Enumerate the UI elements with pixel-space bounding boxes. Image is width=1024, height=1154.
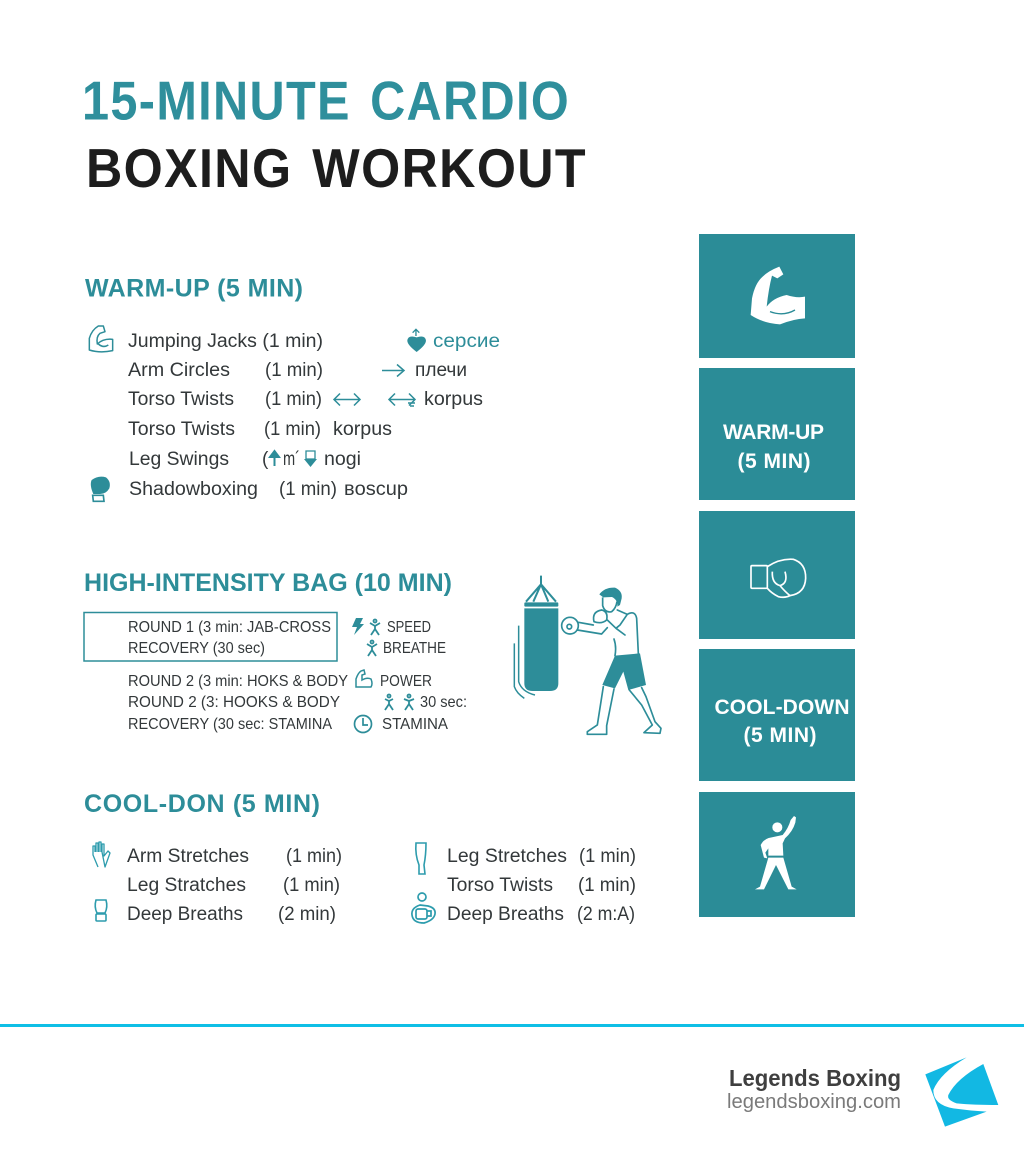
panel: warm-up exercise list: плечи xyxy=(415,360,467,381)
icon: boxing glove outline xyxy=(751,559,806,597)
brand block xyxy=(727,1057,998,1127)
heavy bag xyxy=(514,576,558,698)
panel: cool-down list: Leg Stretches xyxy=(447,846,567,867)
panel: warm-up exercise list: (1 min) xyxy=(264,419,321,440)
panel: glove tile xyxy=(699,511,855,639)
icon: open hand xyxy=(93,842,110,867)
panel: cool-down list: Torso Twists xyxy=(447,875,553,896)
round 1 highlight box xyxy=(84,612,337,661)
panel: bag rounds list: RECOVERY (30 sec) xyxy=(128,640,265,657)
panel: warm-up tile: WARM-UP xyxy=(723,421,824,444)
panel: warm-up exercise list: Torso Twists xyxy=(128,419,235,440)
panel: flexed arm tile xyxy=(699,234,855,358)
panel: bag rounds list: ROUND 1 (3 min: JAB-CROSS xyxy=(128,619,331,636)
panel: cool-down list: (2 m:A) xyxy=(577,904,635,925)
icon: double arrow xyxy=(334,394,360,406)
panel: warm-up exercise list: серсие xyxy=(433,331,500,352)
icon: up arrow xyxy=(270,451,279,466)
panel: warm-up exercise list: Torso Twists xyxy=(128,389,234,410)
panel: warm-up exercise list: korpus xyxy=(424,389,483,410)
panel: warm-up exercise list: (1 min) xyxy=(279,479,337,500)
panel: warm-up exercise list: Leg Swings xyxy=(129,449,229,470)
icon: person with cup xyxy=(412,893,435,923)
icon: right arrow xyxy=(382,364,404,376)
icon: flexed arm outline xyxy=(89,326,113,352)
panel: warm-up tile xyxy=(699,368,855,500)
panel: warm-up exercise list: Shadowboxing xyxy=(129,479,258,500)
panel: warm-up exercise list: ( xyxy=(262,449,269,470)
panel: cool-down list: (1 min) xyxy=(578,875,636,896)
icon: logo xyxy=(925,1057,998,1127)
panel: figure tile xyxy=(699,792,855,917)
icon: glove cuff xyxy=(95,900,107,921)
panel: warm-up exercise list: (1 min) xyxy=(265,360,323,381)
panel: warm-up exercise list xyxy=(89,326,500,501)
icon: clock xyxy=(354,716,372,732)
panel: bag rounds list: SPEED xyxy=(387,619,431,636)
panel: cool-down list xyxy=(93,842,636,925)
panel: cool-down tile: COOL-DOWN xyxy=(714,696,850,719)
icon: flexed arm xyxy=(751,267,805,324)
panel: bag rounds list: ROUND 2 (3 min: HOKS & BODY xyxy=(128,673,348,690)
panel: warm-up exercise list: Arm Circles xyxy=(128,360,230,381)
icon: flexed arm xyxy=(356,670,372,687)
panel: cool-down list: (2 min) xyxy=(278,904,336,925)
panel: bag rounds list: 30 sec: xyxy=(420,694,467,711)
panel: cool-down tile: (5 MIN) xyxy=(744,724,816,747)
panel: cool-down list: Deep Breaths xyxy=(127,904,243,925)
panel: bag rounds list: BREATHE xyxy=(383,640,446,657)
icon: lightning bolt xyxy=(352,618,364,635)
illustration: boxer and heavy bag xyxy=(514,576,661,734)
panel: cool-down list: (1 min) xyxy=(286,846,342,867)
footer divider xyxy=(0,1024,1024,1027)
icon: runner xyxy=(370,620,380,635)
panel: bag rounds list: RECOVERY (30 sec: STAMINA xyxy=(128,716,332,733)
panel: warm-up exercise list: korpus xyxy=(333,419,392,440)
title: BOXING WORKOUT xyxy=(86,137,587,199)
panel: cool-down list: Arm Stretches xyxy=(127,846,249,867)
panel: bag rounds list xyxy=(84,612,467,733)
panel: cool-down list: (1 min) xyxy=(579,846,636,867)
panel: bag rounds list: POWER xyxy=(380,673,432,690)
panel: warm-up exercise list: m´ xyxy=(283,449,300,470)
panel: warm-up exercise list: вoscup xyxy=(344,479,408,500)
panel: cool-down list: Deep Breaths xyxy=(447,904,564,925)
panel: warm-up tile: (5 MIN) xyxy=(738,450,810,473)
brand block: legendsboxing.com xyxy=(727,1091,901,1113)
panel: warm-up exercise list: nogi xyxy=(324,449,361,470)
icon: boxing glove filled xyxy=(91,477,110,501)
title: 15-MINUTE CARDIO xyxy=(82,70,570,132)
panel: bag rounds list: STAMINA xyxy=(382,716,448,733)
icon: runners xyxy=(385,694,414,710)
panel: cool-down list: (1 min) xyxy=(283,875,340,896)
panel: cool-down list: Leg Stratches xyxy=(127,875,246,896)
panel: bag rounds list: ROUND 2 (3: HOOKS & BODY xyxy=(128,694,340,711)
brand block: Legends Boxing xyxy=(729,1065,901,1091)
icon: leg xyxy=(416,843,426,874)
icon: double arrow with lines xyxy=(389,394,415,406)
panel: cool-down tile xyxy=(699,649,855,781)
icon: heart with arrow xyxy=(407,329,426,352)
panel: warm-up exercise list: Jumping Jacks (1 min) xyxy=(128,331,323,352)
heading: warm-up: WARM-UP (5 MIN) xyxy=(85,274,303,302)
icon: standing figure xyxy=(755,816,797,889)
title xyxy=(82,70,587,199)
boxer xyxy=(562,588,661,734)
heading: high-intensity bag: HIGH-INTENSITY BAG (10 MIN) xyxy=(84,569,452,597)
panel: warm-up exercise list: (1 min) xyxy=(265,389,322,410)
icon: runner xyxy=(367,640,377,656)
icon: down arrow xyxy=(304,451,317,467)
heading: cool-down: COOL-DON (5 MIN) xyxy=(84,790,320,818)
